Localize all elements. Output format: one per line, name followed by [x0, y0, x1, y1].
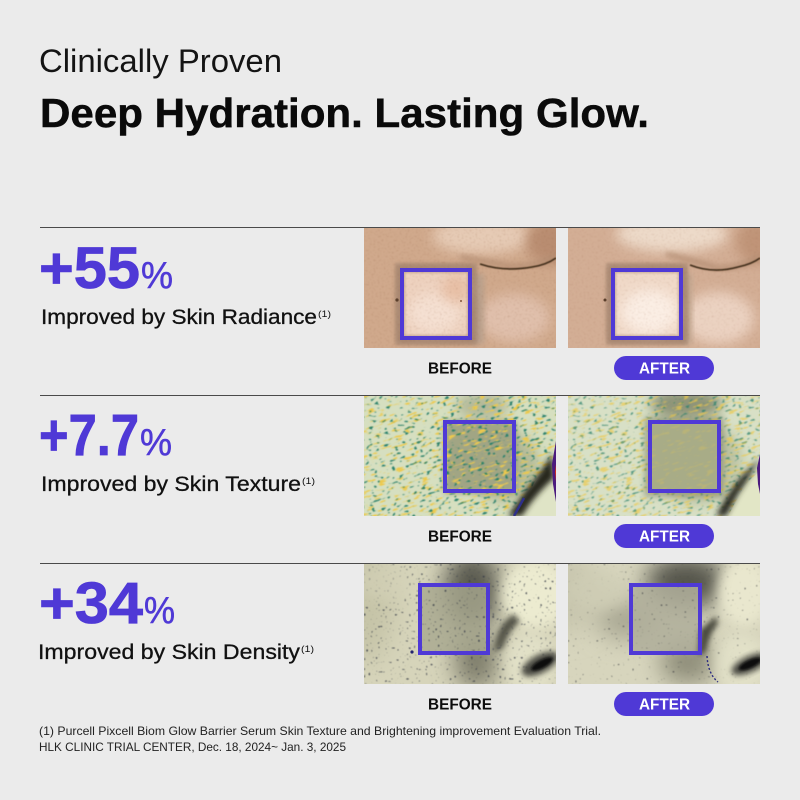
stat: +55%: %: [141, 255, 173, 297]
title line 2: Deep Hydration. Lasting Glow.: [40, 90, 649, 136]
panel: skin density: [40, 564, 760, 716]
label: skin texture: Improved by Skin Texture: [41, 473, 301, 496]
caption: before: BEFORE: [428, 696, 492, 714]
title line 1: Clinically Proven: [39, 43, 282, 79]
badge: after: [614, 524, 714, 548]
photo: radiance before: [364, 228, 556, 348]
label: skin radiance: Improved by Skin Radiance: [41, 306, 317, 329]
infographic canvas: [40, 48, 760, 752]
badge: after: AFTER: [639, 696, 690, 714]
panel: skin texture: [40, 396, 760, 548]
photo: density after: [568, 564, 760, 684]
footnote: (1) Purcell Pixcell Biom Glow Barrier Serum Skin Texture and Brightening improvement Evaluation Trial.: [39, 724, 601, 738]
label: skin density: (1): [301, 644, 314, 655]
label: skin density: Improved by Skin Density: [38, 641, 301, 664]
photo: texture after: [568, 396, 760, 516]
photo: density before: [364, 564, 556, 684]
label: skin texture: (1): [302, 476, 315, 487]
caption: before: BEFORE: [428, 360, 492, 378]
heading: [39, 43, 649, 136]
badge: after: [614, 692, 714, 716]
footnote: HLK CLINIC TRIAL CENTER, Dec. 18, 2024~ Jan. 3, 2025: [39, 740, 346, 754]
stat: +7.7%: +7.7: [39, 403, 139, 468]
stat: +34%: +34: [39, 571, 143, 636]
label: skin radiance: (1): [318, 309, 331, 320]
photo: radiance after: [568, 228, 760, 348]
badge: after: AFTER: [639, 360, 690, 378]
panel: skin radiance: [39, 216, 776, 380]
photo: texture before: [364, 396, 556, 516]
caption: before: BEFORE: [428, 528, 492, 546]
stat: +55%: +55: [39, 236, 140, 301]
stat: +7.7%: %: [140, 422, 172, 464]
stat: +34%: %: [144, 590, 175, 632]
badge: after: AFTER: [639, 528, 690, 546]
footnote: [39, 724, 601, 754]
badge: after: [614, 356, 714, 380]
